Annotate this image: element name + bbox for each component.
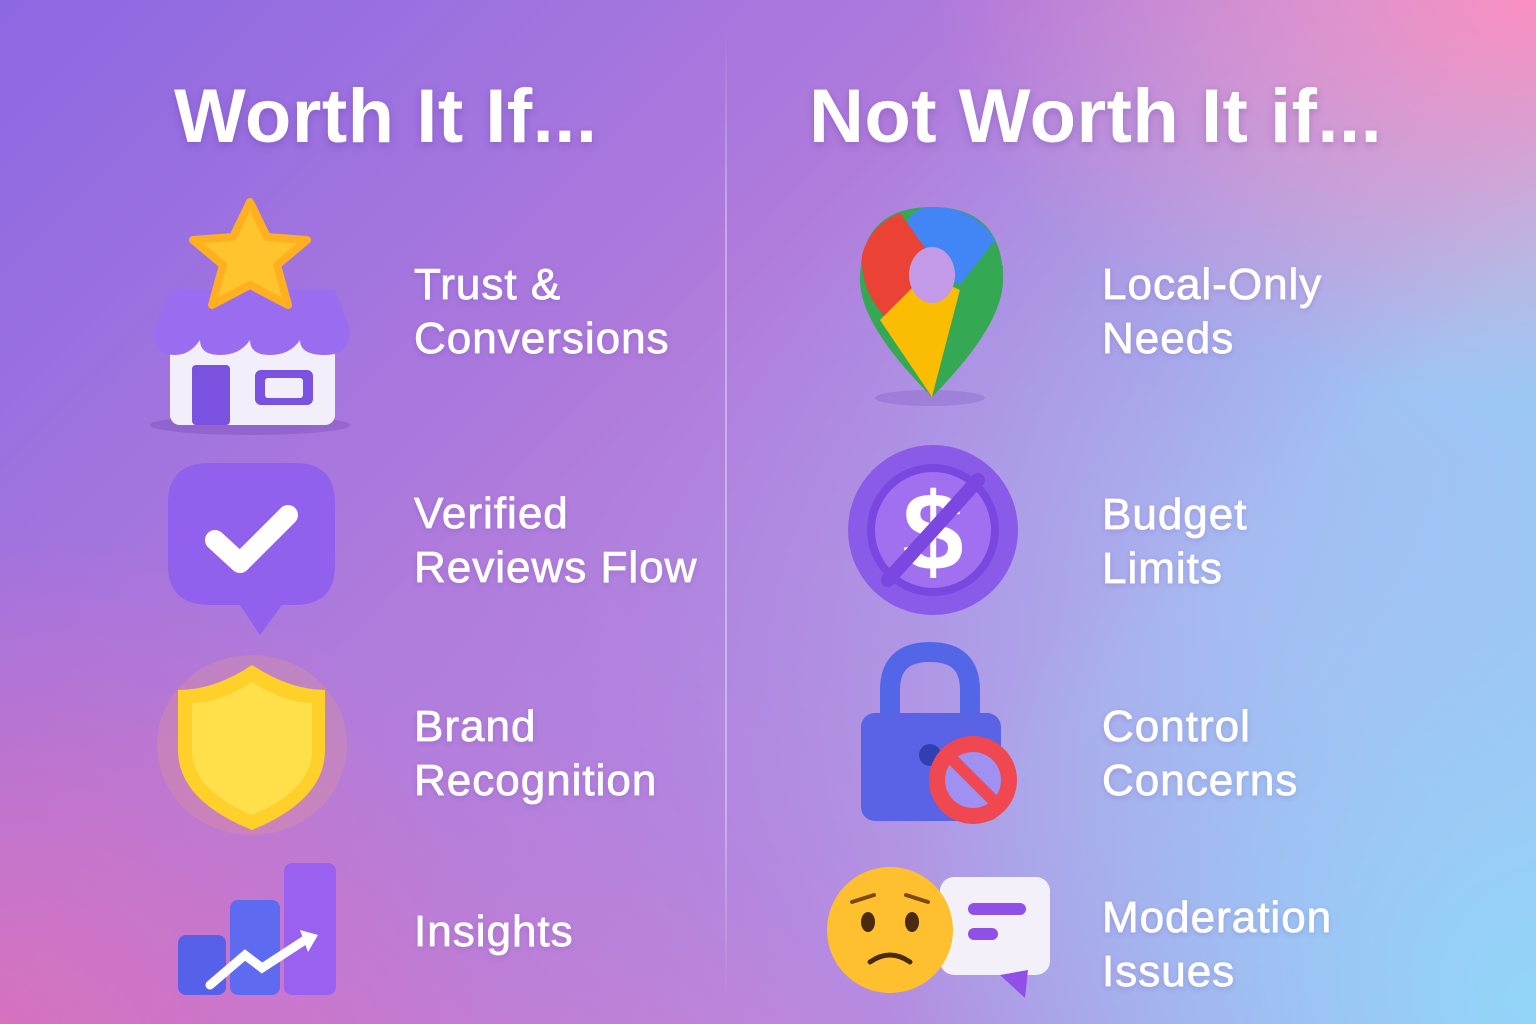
label: local: Local-Only	[1102, 260, 1322, 309]
label: moderation: Issues	[1102, 947, 1235, 996]
label: verified reviews: Verified	[414, 489, 569, 538]
title: worth it: Worth It If...	[174, 74, 598, 159]
label: budget: Limits	[1102, 544, 1223, 593]
label: brand	[414, 702, 657, 805]
label: trust: Conversions	[414, 314, 670, 363]
label: local	[1102, 260, 1322, 363]
icon: bar chart	[178, 863, 336, 995]
label: local: Needs	[1102, 314, 1234, 363]
label: moderation: Moderation	[1102, 893, 1332, 942]
icon: check bubble	[168, 463, 335, 635]
label: trust	[414, 260, 670, 363]
label: insights: Insights	[414, 907, 574, 956]
label: budget: Budget	[1102, 490, 1247, 539]
label: verified reviews: Reviews Flow	[414, 543, 697, 592]
label: control: Concerns	[1102, 756, 1298, 805]
title: not worth it: Not Worth It if...	[809, 74, 1382, 159]
label: brand: Recognition	[414, 756, 657, 805]
icon: map pin	[860, 207, 1003, 406]
icon: lock with no sign	[861, 652, 1017, 824]
label: brand: Brand	[414, 702, 536, 751]
icon: no dollar	[848, 445, 1018, 615]
label: control: Control	[1102, 702, 1251, 751]
label: trust: Trust &	[414, 260, 561, 309]
label: moderation	[1102, 893, 1332, 996]
icon: sad face with message	[827, 867, 1050, 998]
icon: shield	[157, 655, 347, 835]
icon: store with star	[150, 202, 350, 435]
label: budget	[1102, 490, 1247, 593]
icon: no dollar: $	[902, 471, 964, 594]
label: verified reviews	[414, 489, 697, 592]
label: control	[1102, 702, 1298, 805]
